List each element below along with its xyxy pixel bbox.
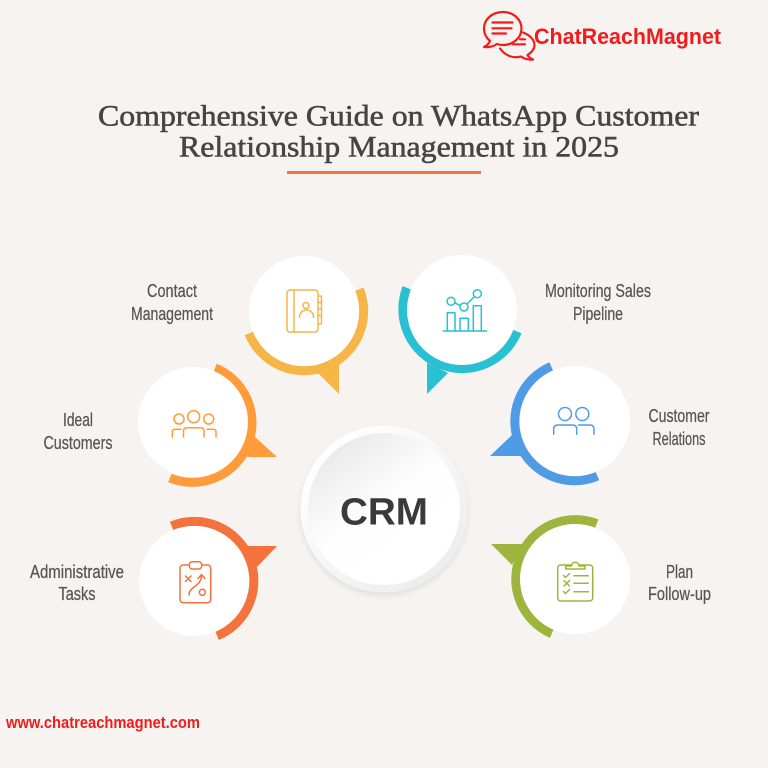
- panel: customer relations: [490, 366, 710, 481]
- logo: ChatReachMagnet: [484, 12, 722, 60]
- icon: bar and line chart: [443, 290, 487, 331]
- label: Relations: [652, 429, 706, 449]
- website url: www.chatreachmagnet.com: [5, 713, 200, 732]
- icon: strategy clipboard: [180, 562, 211, 603]
- label: Contact: [147, 281, 197, 301]
- label: Plan: [666, 562, 693, 582]
- label: Pipeline: [573, 304, 623, 324]
- label: [648, 406, 710, 449]
- label: Customers: [44, 433, 112, 453]
- label: Tasks: [58, 584, 96, 604]
- hub label: CRM: [340, 492, 428, 534]
- panel: central CRM hub: [300, 426, 468, 592]
- panel: ideal customers: [44, 367, 277, 482]
- title: [98, 100, 699, 164]
- panel: administrative tasks: [30, 521, 277, 636]
- label: Administrative: [30, 562, 124, 582]
- icon: two people: [554, 408, 594, 434]
- title: Relationship Management in 2025: [179, 130, 619, 164]
- label: [545, 281, 651, 324]
- title underline: [287, 171, 481, 174]
- label: Monitoring Sales: [545, 281, 651, 301]
- logo wordmark: ChatReachMagnet: [534, 24, 722, 49]
- label: [648, 562, 711, 604]
- icon: address book: [287, 290, 322, 332]
- label: Ideal: [63, 410, 93, 430]
- label: [30, 562, 124, 604]
- panel: monitoring sales pipeline: [403, 255, 651, 394]
- icon: checklist clipboard: [558, 562, 593, 601]
- label: [44, 410, 112, 453]
- label: Follow-up: [648, 584, 711, 604]
- icon: group of people: [172, 411, 216, 437]
- ring and pointer: [490, 366, 597, 481]
- ring and pointer: [403, 288, 517, 394]
- icon: chat bubbles: [484, 12, 534, 60]
- ring and pointer: [170, 368, 277, 482]
- panel: contact management: [131, 256, 364, 394]
- panel: plan follow-up: [491, 520, 711, 634]
- ring and pointer: [172, 521, 277, 636]
- label: Management: [131, 304, 213, 324]
- label: [131, 281, 213, 324]
- ring and pointer: [491, 520, 597, 634]
- title: Comprehensive Guide on WhatsApp Customer: [98, 100, 699, 132]
- ring and pointer: [249, 289, 364, 394]
- label: Customer: [648, 406, 710, 426]
